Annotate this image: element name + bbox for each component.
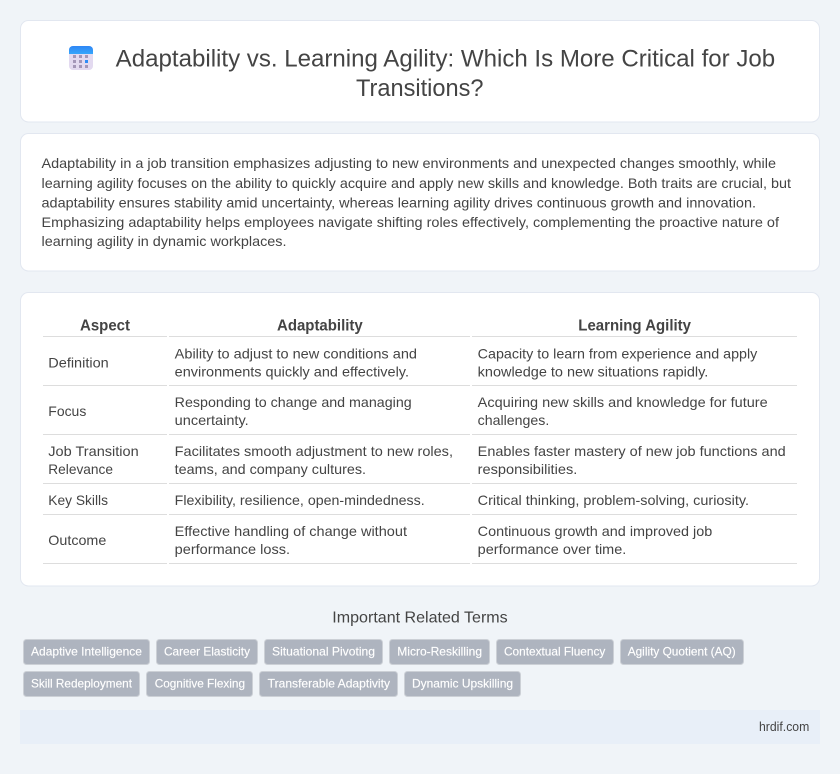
chip: micro-reskilling: Micro-Reskilling <box>397 645 482 659</box>
table row: job transition relevance: Enables faster mastery of new job functions and <box>478 443 786 459</box>
table header: Aspect <box>80 318 131 335</box>
heading: important related terms: Important Related Terms <box>332 609 508 626</box>
chip: agility quotient: Agility Quotient (AQ) <box>628 645 736 659</box>
table row: focus: uncertainty. <box>175 412 249 428</box>
panel: comparison table card <box>20 292 820 586</box>
chip: micro-reskilling <box>390 640 490 664</box>
chip: agility quotient <box>620 640 744 664</box>
table row: focus: Acquiring new skills and knowledge for future <box>478 394 768 410</box>
table row: focus: challenges. <box>478 412 549 428</box>
chip: dynamic upskilling: Dynamic Upskilling <box>412 677 513 691</box>
chip: adaptive intelligence: Adaptive Intelligence <box>31 645 142 659</box>
chip: transferable adaptivity: Transferable Adaptivity <box>268 677 390 691</box>
table row: key skills <box>43 492 797 515</box>
title: Transitions? <box>356 75 484 102</box>
table row: definition: environments quickly and effectively. <box>175 363 409 379</box>
table row: focus: Focus <box>48 403 86 419</box>
text block: summary paragraph: Emphasizing adaptability helps employees navigate shifting roles effectively, complementing the proactive nature of <box>42 214 779 230</box>
chip: contextual fluency <box>496 640 614 664</box>
table row: key skills: Flexibility, resilience, open-mindedness. <box>175 492 425 508</box>
table row: definition: knowledge to new situations rapidly. <box>478 363 708 379</box>
table row: key skills: Critical thinking, problem-solving, curiosity. <box>478 492 749 508</box>
chip: career elasticity <box>156 640 258 664</box>
chip: cognitive flexing: Cognitive Flexing <box>155 677 245 691</box>
table row: job transition relevance: Facilitates smooth adjustment to new roles, <box>175 443 453 459</box>
table row: outcome: performance over time. <box>478 541 626 557</box>
table header <box>43 318 797 337</box>
table row: outcome: Continuous growth and improved job <box>478 523 713 539</box>
chip: cognitive flexing <box>146 672 252 696</box>
table row: job transition relevance: Job Transition <box>48 443 139 459</box>
panel: related term chips <box>24 640 744 696</box>
text block: summary paragraph: learning agility in dynamic workplaces. <box>42 233 286 249</box>
footer bar: hrdif.com <box>759 719 809 734</box>
chip: contextual fluency: Contextual Fluency <box>504 645 605 659</box>
table row: definition: Definition <box>48 354 109 370</box>
table row: job transition relevance: responsibilities. <box>478 461 577 477</box>
text block: summary paragraph: learning agility focuses on the ability to quickly acquire and apply new skills and knowledge. Both traits are crucial, but <box>42 175 791 191</box>
table row: outcome: performance loss. <box>175 541 290 557</box>
table row: job transition relevance: Relevance <box>48 461 113 477</box>
chip: situational pivoting <box>264 640 382 664</box>
table header: Learning Agility <box>578 318 691 335</box>
table row: outcome <box>43 523 797 564</box>
icon: calendar <box>69 46 93 70</box>
title: Adaptability vs. Learning Agility: Which Is More Critical for Job <box>116 46 775 73</box>
text block: summary paragraph: adaptability ensures stability amid uncertainty, whereas learning agility drives continuous growth and innovation. <box>42 194 756 210</box>
table row: key skills: Key Skills <box>48 492 108 508</box>
chip: skill redeployment: Skill Redeployment <box>31 677 133 691</box>
table row: job transition relevance <box>43 443 797 484</box>
table row: definition: Ability to adjust to new conditions and <box>175 345 417 361</box>
table row: focus: Responding to change and managing <box>175 394 412 410</box>
table row: outcome: Effective handling of change without <box>175 523 407 539</box>
table row: job transition relevance: teams, and company cultures. <box>175 461 366 477</box>
panel: title card <box>20 20 820 122</box>
text block: summary paragraph <box>42 155 791 249</box>
table row: definition <box>43 345 797 386</box>
panel: summary card <box>20 134 820 271</box>
chip: dynamic upskilling <box>404 672 520 696</box>
table header: Adaptability <box>277 318 363 335</box>
text block: summary paragraph: Adaptability in a job transition emphasizes adjusting to new environments and unexpected changes smoothly, while <box>42 155 776 171</box>
title <box>116 46 775 102</box>
chip: adaptive intelligence <box>24 640 150 664</box>
table row: definition: Capacity to learn from experience and apply <box>478 345 757 361</box>
table row: outcome: Outcome <box>48 532 107 548</box>
chip: skill redeployment <box>24 672 140 696</box>
table row: focus <box>43 394 797 435</box>
chip: transferable adaptivity <box>260 672 398 696</box>
footer bar <box>20 710 820 744</box>
chip: situational pivoting: Situational Pivoting <box>272 645 375 659</box>
chip: career elasticity: Career Elasticity <box>164 645 250 659</box>
